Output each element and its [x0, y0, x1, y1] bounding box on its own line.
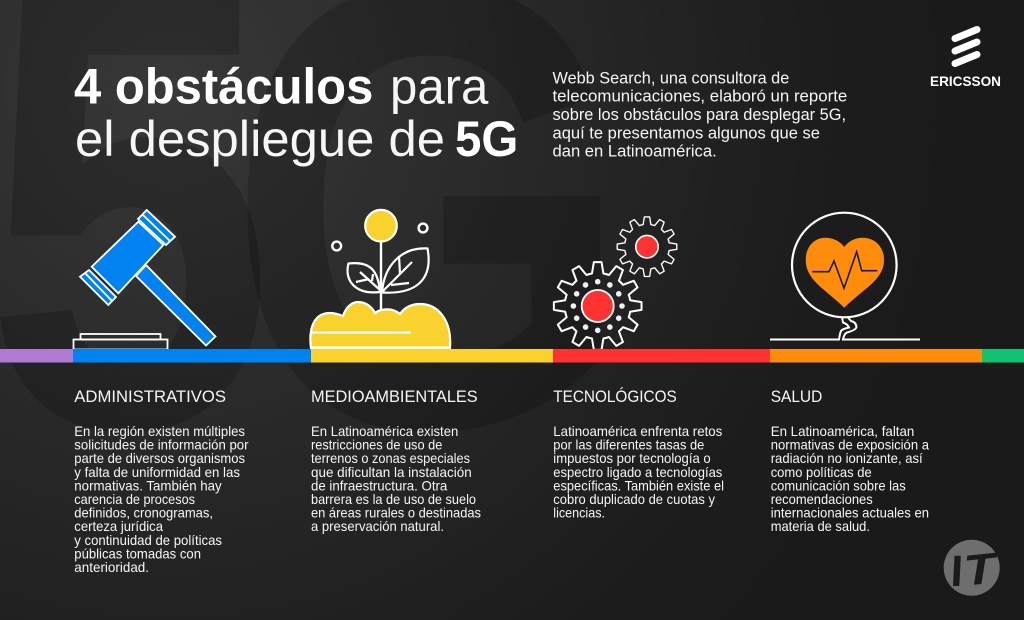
heading: administrativos: ADMINISTRATIVOS — [74, 387, 226, 406]
text: medioambientales — [311, 423, 481, 534]
text: administrativos: En la región existen múltiples — [74, 423, 245, 439]
text: administrativos: carencia de procesos — [74, 491, 195, 507]
text: tecnológicos: Latinoamérica enfrenta retos — [553, 423, 722, 439]
large gear — [554, 262, 642, 350]
intro text — [552, 68, 847, 161]
text: administrativos: y continuidad de políticas — [74, 532, 222, 548]
text: administrativos: solicitudes de información por — [74, 437, 249, 453]
text: administrativos: y falta de uniformidad en las — [74, 464, 240, 480]
text: administrativos: anterioridad. — [74, 559, 149, 575]
intro text: dan en Latinoamérica. — [552, 142, 717, 161]
text: tecnológicos: licencias. — [553, 505, 605, 521]
text: tecnológicos: cobro duplicado de cuotas y — [553, 491, 715, 507]
text: medioambientales: de infraestructura. Otra — [311, 477, 448, 493]
text: salud: normativas de exposición a — [771, 437, 929, 453]
heading: medioambientales: MEDIOAMBIENTALES — [311, 387, 478, 406]
intro text: Webb Search, una consultora de — [552, 68, 789, 87]
panel: administrativos — [74, 387, 249, 575]
panel: salud — [771, 387, 929, 534]
heading: tecnológicos: TECNOLÓGICOS — [553, 387, 677, 406]
title — [74, 58, 518, 167]
text: tecnológicos — [553, 423, 724, 521]
text: medioambientales: que dificultan la instalación — [311, 464, 472, 480]
text: administrativos: parte de diversos organismos — [74, 450, 245, 466]
text: administrativos — [74, 423, 249, 575]
text: medioambientales: terrenos o zonas especiales — [311, 450, 470, 466]
icon: gavel — [74, 210, 216, 350]
text: administrativos: definidos, cronogramas, — [74, 505, 213, 521]
title: el despliegue de — [75, 111, 445, 167]
text: medioambientales: En Latinoamérica existen — [311, 423, 458, 439]
text: salud: comunicación sobre las — [771, 477, 906, 493]
text: administrativos: públicas tomadas con — [74, 545, 201, 561]
icon: gears — [554, 217, 677, 350]
title: 4 obstáculos — [74, 58, 373, 114]
logo: IT badge: T — [960, 544, 1000, 596]
title: 5G — [455, 111, 518, 167]
logo: Ericsson — [930, 30, 1001, 89]
intro text: aquí te presentamos algunos que se — [552, 124, 820, 143]
panel: medioambientales — [311, 387, 481, 534]
text: medioambientales: en áreas rurales o destinadas — [311, 505, 481, 521]
text: medioambientales: restricciones de uso de — [311, 437, 442, 453]
background watermark: 5G — [0, 0, 633, 561]
logo: IT badge — [944, 540, 1000, 596]
text: administrativos: normativas. También hay — [74, 477, 222, 493]
text: salud: materia de salud. — [771, 518, 870, 534]
text: salud — [771, 423, 929, 534]
text: tecnológicos: específicas. También existe el — [553, 477, 724, 493]
intro text: sobre los obstáculos para desplegar 5G, — [552, 105, 846, 124]
text: tecnológicos: impuestos por tecnología o — [553, 450, 711, 466]
icon: plant — [310, 210, 450, 348]
text: medioambientales: a preservación natural. — [311, 518, 444, 534]
panel: tecnológicos — [553, 387, 724, 521]
text: administrativos: certeza jurídica — [74, 518, 163, 534]
text: medioambientales: barrera es la de uso de suelo — [311, 491, 476, 507]
title: para — [390, 58, 488, 114]
text: salud: En Latinoamérica, faltan — [771, 423, 914, 439]
heading: salud: SALUD — [771, 387, 822, 406]
text: tecnológicos: por las diferentes tasas de — [553, 437, 704, 453]
text: tecnológicos: espectro ligado a tecnologías — [553, 464, 722, 480]
icon: heart in circle — [770, 213, 920, 340]
small gear — [617, 217, 677, 277]
text: salud: recomendaciones — [771, 491, 873, 507]
text: salud: internacionales actuales en — [771, 505, 929, 521]
text: salud: radiación no ionizante, así — [771, 450, 923, 466]
intro text: telecomunicaciones, elaboró un reporte — [552, 87, 847, 106]
colour bar — [0, 349, 1024, 362]
text: salud: como políticas de — [771, 464, 872, 480]
logo: IT badge: I — [949, 547, 964, 596]
logo: Ericsson: ERICSSON — [930, 73, 1001, 89]
